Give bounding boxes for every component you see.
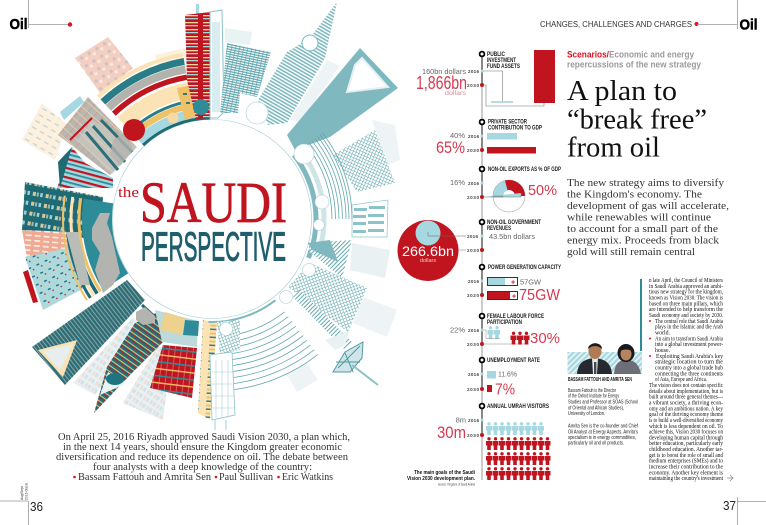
panel: unemployment rate: 7% [495,382,515,398]
panel: public investment fund assets: PUBLIC [487,52,506,58]
chart caption: The main goals of the Saudi [414,470,475,476]
article body column: goal of the thriving economy theme [649,411,723,418]
article body column: in Saudi Arabia approved an ambi- [649,284,723,290]
photo caption and author bios: Bassam Fattouh is the Director [568,388,616,394]
page number 36 [0,483,43,525]
article body column: plays in the Islamic and the Arab [655,325,723,331]
standfirst paragraph: while renewables will continue [567,212,711,224]
panel: female labour force participation [450,314,560,347]
article body column: n late April, the Council of Ministers [649,277,724,284]
intro text block [56,432,350,483]
article body column: maintaining the country's investment [649,476,723,482]
intro text block: diversification and reduce its dependence on oil. The debate between [56,452,349,463]
article body column: strategic location to turn the [655,360,723,366]
arrow: continue reading [727,475,733,481]
photo caption and author bios: specialism is in energy commodities, [568,435,636,441]
article body column: of Asia, Europe and Africa. [655,376,707,383]
article body column: details about implementation, but is [649,389,724,395]
panel: annual Umrah visitors: 8m [456,416,466,424]
panel: non-oil government revenues [398,220,541,281]
chart caption [407,470,476,486]
panel: private sector contribution to GDP: 65% [436,138,465,157]
standfirst paragraph [567,177,729,258]
pictogram: 2016 visitors [486,422,544,435]
headline [567,75,707,164]
panel: unemployment rate: UNEMPLOYMENT RATE [487,358,540,364]
right half: pale teal line-drawn buildings [0,0,453,460]
page number 36: 2016 Oasis [24,483,28,500]
intro text block: On April 25, 2016 Riyadh approved Saudi Vision 2030, a plan which, [58,432,350,443]
panel: private sector contribution to GDP: 40% [450,131,465,140]
timeline spine: 2016 [468,372,479,377]
timeline spine: 2030 [467,387,479,392]
white central disc [113,120,311,318]
timeline spine: 2020 [467,293,479,298]
intro text block: Paul Sullivan [219,472,274,483]
article body column: into a global investment power- [655,342,723,348]
running header, right page: Oil [740,16,758,34]
panel: annual Umrah visitors: 30m [437,423,466,442]
intro text block: four analysts with a deep knowledge of the country: [93,462,312,473]
curved bands, left [6,13,418,425]
standfirst paragraph: energy mix. Proceeds from black [567,234,720,246]
timeline spine: 2030 [467,342,479,347]
timeline spine: 2030 [467,83,479,88]
timeline spine: 2016 [468,279,479,284]
chart caption: Source: Kingdom of Saudi Arabia [438,482,475,486]
article body column: An aim to transform Saudi Arabia [655,335,723,342]
page number 37 [723,497,766,525]
tree blobs, left [123,99,209,141]
page number 37: 37 [723,498,736,513]
timeline spine: 2030 [467,148,479,153]
section label: Scenarios/ [567,50,609,60]
panel: power generation capacity: + [512,294,516,300]
panel: unemployment rate: 11.6% [498,370,517,378]
panel: public investment fund assets: 160bn dollars [422,67,466,76]
pictogram: 2030 visitors [486,437,550,480]
article body column: built around three general themes— [649,395,723,401]
panel: power generation capacity: POWER GENERATION CAPACITY [488,265,561,271]
panel: power generation capacity: 57GW [520,278,542,286]
standfirst paragraph: The new strategy aims to diversify [567,177,725,189]
portrait photo: Bassam Fattouh and Amrita Sen [568,343,642,374]
page number 36: 36 [30,499,43,514]
panel: non-oil government revenues: NON-OIL GOVERNMENT [487,220,541,226]
panel: female labour force participation: FEMALE LABOUR FORCE [487,314,544,320]
article body column: country into a global trade hub [655,366,723,372]
standfirst paragraph: gold will still remain central [567,246,695,258]
panel: public investment fund assets: 1,866bn [416,73,467,93]
panel: non-oil exports as percent of GDP: NON-OIL EXPORTS AS % OF GDP [488,167,561,173]
headline: from oil [567,132,660,164]
panel: non-oil exports as percent of GDP: 50% [528,182,557,199]
article body column: known as Vision 2030. The vision is [649,296,724,302]
panel: private sector contribution to GDP: CONTRIBUTION TO GDP [488,126,542,132]
photo caption and author bios [568,377,638,447]
teal accent bar [640,279,642,351]
panel: non-oil government revenues: dollars [420,258,436,264]
chart caption: Vision 2030 development plan. [407,476,476,482]
panel: annual Umrah visitors [437,404,550,480]
section label [567,50,702,70]
title: the SAUDI PERSPECTIVE: PERSPECTIVE [141,224,286,270]
article body column [649,277,724,482]
page marker: Oil section tab, left page: Oil [10,16,28,33]
article body column: are intended to help transform the [649,306,723,313]
left half: colourful buildings [0,0,448,455]
panel: female labour force participation: PARTICIPATION [487,320,522,326]
intro text block: in the next 14 years, should ensure the Kingdom greater economic [63,442,342,453]
panel: private sector contribution to GDP [436,120,542,157]
title: the SAUDI PERSPECTIVE: SAUDI [140,170,287,235]
running header, right page: CHANGES, CHALLENGES AND CHARGES [540,20,692,29]
standfirst paragraph: to account for a small part of the [567,223,718,235]
article body column: a vibrant society, a thriving econ- [649,400,723,406]
article body column: Exploiting Saudi Arabia's key [656,354,723,360]
section label: Economic and energy [609,50,695,60]
timeline spine [467,52,484,480]
photo caption and author bios: of Oriental and African Studies), [568,405,624,411]
timeline spine: 2016 [468,181,479,186]
panel: power generation capacity [488,265,561,304]
panel: power generation capacity: + [511,280,515,286]
timeline spine: 2016 [468,418,479,423]
photo caption and author bios: Studies and Professor at SOAS (School [568,399,638,405]
concentric arcs, lower right [0,0,453,460]
panel: public investment fund assets: dollars [445,91,466,97]
timeline spine: 2030 [467,248,479,253]
page number 36: Aug/Sept [20,486,24,500]
photo caption and author bios: BASSAM FATTOUH AND AMRITA SEN [568,377,632,383]
timeline spine: 2016 [468,69,479,74]
panel: female labour force participation: 22% [450,326,465,334]
curved bands, top-left [0,0,448,455]
standfirst paragraph: development of gas will accelerate, [567,200,729,212]
timeline spine: 2030 [467,433,479,438]
panel: annual Umrah visitors: ANNUAL UMRAH VISITORS [487,404,549,410]
title: the SAUDI PERSPECTIVE [118,170,287,270]
panel: unemployment rate [487,358,540,398]
panel: non-oil government revenues: 43.5bn dollars [489,232,535,241]
article body column: world. [655,330,671,336]
article body column: based on three main pillars, which [649,301,723,307]
article body column: omy and an ambitious nation. A key [649,406,723,412]
section label: repercussions of the new strategy [567,60,702,70]
running header, right page [540,0,758,34]
page marker: Oil section tab, left page [10,0,72,33]
article body column: get is to boost the role of small and [649,452,723,459]
article body column: is to build a well-diversified economy [649,417,723,424]
timeline spine: 2016 [468,134,479,139]
panel: private sector contribution to GDP: PRIVATE SECTOR [488,120,527,126]
headline: A plan to [567,75,677,107]
article body column: tious new strategy for the kingdom, [649,289,723,296]
photo caption and author bios: Amrita Sen is the co-founder and Chief [568,424,638,430]
article body column: developing human capital through [649,435,723,441]
panel: non-oil exports as percent of GDP: 16% [450,178,465,187]
photo caption and author bios: University of London. [568,411,605,417]
trees, right [220,102,329,336]
intro text block: Eric Watkins [282,472,333,483]
article body column: increase their contribution to the [649,465,723,471]
circular skyline illustration [0,0,453,460]
panel: non-oil exports as percent of GDP [450,167,561,212]
panel: public investment fund assets: INVESTMENT [487,58,516,64]
photo caption and author bios: of the Oxford Institute for Energy [568,394,619,400]
article body column: connecting the three continents [655,371,724,377]
timeline spine: 2030 [467,195,479,200]
article body column: economy. Another key element is [649,470,724,476]
intro text block: Bassam Fattouh and Amrita Sen [78,472,212,483]
article body column: achieve this, Vision 2030 focuses on [649,429,723,436]
title: the SAUDI PERSPECTIVE: the [118,185,139,201]
article body column: The central role that Saudi Arabia [655,319,723,325]
article body column: house. [655,348,671,354]
panel: power generation capacity: 75GW [519,287,561,304]
article body column: medium enterprises (SMEs) and to [649,458,723,465]
panel: public investment fund assets [416,50,555,106]
panel: non-oil government revenues: REVENUES [487,226,511,232]
article body column: Saudi economy and society by 2030. [649,313,723,319]
timeline infographic: Vision 2030 goals [398,50,561,486]
panel: public investment fund assets: FUND ASSETS [487,64,520,70]
panel: female labour force participation: 30% [530,330,560,347]
article body column: better education, particularly early [649,441,723,447]
headline: “break free” [567,104,707,136]
photo caption and author bios: particularly oil and oil products. [568,441,624,447]
article body column: childhood education. Another tar- [649,447,723,453]
panel: non-oil government revenues: 266.6bn [402,243,454,259]
photo caption and author bios: Oil Analyst at Energy Aspects. Amrita's [568,429,638,435]
article body column: The vision does not contain specific [649,382,723,389]
article body column: which is less dependent on oil. To [649,424,723,430]
concentric arcs, right [15,22,409,416]
icon: leaf-shaped tower [333,342,378,385]
timeline spine: 2016 [468,328,479,333]
timeline spine: 2016 [467,234,478,239]
standfirst paragraph: the Kingdom's economy. The [567,188,702,200]
